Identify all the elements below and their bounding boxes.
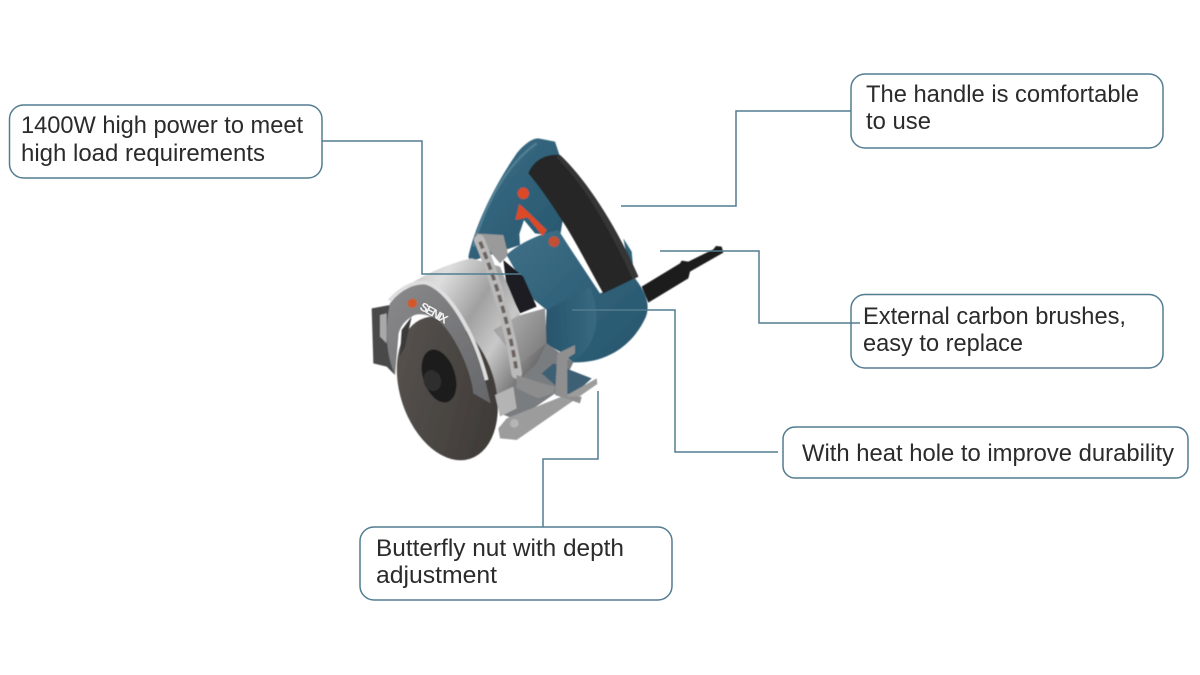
callout: heat hole: With heat hole to improve durability	[802, 440, 1174, 467]
silver guard	[392, 258, 547, 403]
black grip	[528, 155, 638, 293]
arbor nut	[421, 368, 444, 393]
guard front ring	[387, 284, 491, 403]
guard rim highlight	[389, 283, 487, 380]
callout: butterfly nut: Butterfly nut with depth	[376, 535, 624, 562]
callout: power: 1400W high power to meet	[21, 112, 303, 139]
silver shadow	[493, 308, 546, 363]
handle frame	[468, 138, 567, 262]
housing shaded section	[545, 287, 596, 362]
callout: carbon brushes	[851, 294, 1163, 368]
handle edge highlight	[473, 143, 537, 247]
callout: butterfly nut	[360, 527, 672, 600]
arc slot	[480, 242, 517, 372]
brand label: SENIX	[418, 299, 450, 327]
trigger lever	[515, 204, 547, 236]
butterfly nut	[555, 345, 582, 403]
leader line: carbon brushes	[660, 251, 860, 323]
motor vents	[503, 260, 537, 313]
callout: carbon brushes: External carbon brushes,	[863, 303, 1126, 330]
arbor flange	[415, 345, 463, 407]
callout: butterfly nut: adjustment	[376, 562, 497, 589]
motor housing	[507, 230, 648, 362]
blue base inner	[542, 363, 592, 398]
leader line: butterfly nut	[543, 391, 598, 527]
clamp pivot	[517, 375, 555, 398]
rear base plate	[372, 305, 395, 375]
rear plate highlight	[380, 313, 387, 343]
silver bracket	[475, 233, 508, 263]
power cord	[642, 246, 723, 303]
callout: power	[10, 105, 322, 178]
callout: handle	[851, 74, 1163, 148]
base plate	[498, 378, 597, 440]
blade	[379, 303, 515, 473]
grip highlight	[556, 155, 638, 279]
guard slot	[400, 317, 412, 357]
trigger knob	[518, 188, 529, 199]
brand logo mark	[408, 299, 417, 308]
callout: heat hole	[783, 427, 1188, 478]
leader line: power	[322, 141, 521, 274]
callout: handle: The handle is comfortable	[866, 81, 1139, 108]
leader line: heat hole	[572, 310, 778, 452]
clamp block	[495, 387, 517, 417]
callout: carbon brushes: easy to replace	[863, 330, 1023, 357]
callout: handle: to use	[866, 108, 931, 135]
blue sliver behind grip	[623, 238, 634, 277]
callout: power: high load requirements	[21, 140, 265, 167]
red trigger	[515, 188, 559, 247]
product: SENIX cutter	[372, 138, 723, 473]
depth arc bracket	[479, 240, 517, 373]
leader line: handle	[621, 111, 851, 206]
base rivet	[510, 419, 519, 428]
red dial	[549, 236, 559, 247]
mechanism backing	[500, 343, 573, 420]
